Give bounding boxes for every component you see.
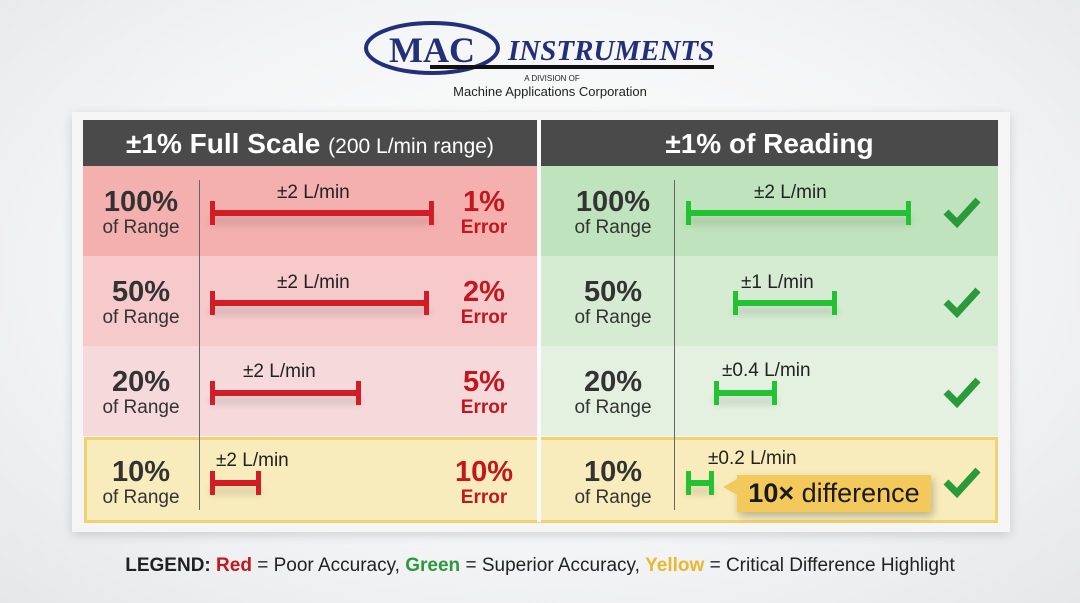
logo: MAC: [389, 30, 475, 70]
text: ±2 L/min: [277, 272, 350, 293]
error labels: [461, 186, 507, 238]
text: 50%: [112, 276, 170, 308]
text: of Range: [102, 307, 180, 328]
text: 50%: [584, 276, 642, 308]
header: full scale: [83, 120, 537, 167]
text: 20%: [584, 366, 642, 398]
text: ±0.4 L/min: [722, 360, 811, 381]
left row labels: [102, 186, 180, 238]
text: 10%: [455, 456, 513, 488]
text: 20%: [112, 366, 170, 398]
logo: Machine Applications Corporation: [453, 84, 647, 99]
right row labels: 100%: [576, 186, 650, 218]
red bars: ±2 L/min: [277, 182, 350, 203]
error labels: Error: [461, 217, 507, 238]
text: ±2 L/min: [243, 361, 316, 382]
right panel rows: [541, 166, 998, 436]
left row labels: 100%: [104, 186, 178, 218]
header: of reading: ±1% of Reading: [665, 128, 874, 159]
text: ±2 L/min: [216, 450, 289, 471]
text: Error: [461, 397, 507, 418]
text: 10%: [112, 456, 170, 488]
checkmarks: [944, 198, 980, 228]
text: ±0.2 L/min: [708, 448, 797, 469]
green bars: ±2 L/min: [754, 182, 827, 203]
text: of Range: [574, 487, 652, 508]
highlighted 10% row: [84, 437, 998, 523]
text: of Range: [102, 487, 180, 508]
header: of reading: [541, 120, 998, 167]
callout: 10x difference: 10× difference: [748, 478, 920, 508]
error labels: 1%: [463, 186, 505, 218]
text: 5%: [463, 366, 505, 398]
table panel: [72, 112, 1010, 532]
logo: INSTRUMENTS: [507, 35, 714, 67]
text: Error: [461, 307, 507, 328]
logo: [364, 21, 714, 99]
text: ±1 L/min: [741, 272, 814, 293]
legend: LEGEND: Red = Poor Accuracy, Green = Superior Accuracy, Yellow = Critical Difference Highlight: [125, 555, 955, 576]
left row labels: of Range: [102, 217, 180, 238]
logo: A DIVISION OF: [524, 74, 580, 83]
text: 10%: [584, 456, 642, 488]
text: of Range: [102, 397, 180, 418]
right row labels: [574, 186, 652, 238]
text: of Range: [574, 397, 652, 418]
right row labels: of Range: [574, 217, 652, 238]
text: of Range: [574, 307, 652, 328]
text: 2%: [463, 276, 505, 308]
left panel rows: [83, 166, 537, 436]
text: Error: [461, 487, 507, 508]
header: full scale: ±1% Full Scale (200 L/min range): [126, 128, 494, 159]
